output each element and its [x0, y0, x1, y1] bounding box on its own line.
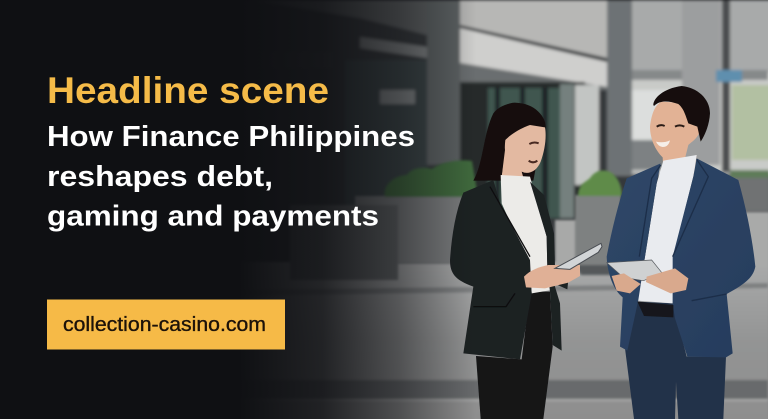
white blouse	[501, 175, 552, 293]
plaza pavement	[240, 212, 768, 419]
black blazer	[450, 180, 568, 359]
jacket lapels	[639, 159, 727, 301]
planters with shrubs	[290, 160, 622, 280]
eye and smile	[529, 142, 539, 162]
neck and face	[502, 125, 546, 183]
hair	[653, 86, 710, 142]
tablet	[555, 243, 602, 269]
subtitle line 3: gaming and payments	[47, 200, 379, 232]
navy trousers	[625, 302, 726, 419]
lapel lines	[473, 187, 530, 307]
teeth	[656, 140, 670, 147]
hair front	[491, 103, 546, 177]
pants	[476, 292, 553, 419]
subtitle line 2: reshapes debt,	[47, 161, 273, 193]
subtitle line 1: How Finance Philippines	[47, 121, 415, 153]
hands	[612, 268, 688, 293]
white shirt	[637, 155, 697, 303]
belt	[637, 302, 673, 317]
badge label: collection-casino.com	[63, 314, 266, 336]
building and plaza backdrop	[240, 0, 768, 280]
background photo: office plaza	[240, 0, 768, 419]
neck and face	[650, 102, 700, 177]
title: Headline scene: Headline scene	[47, 70, 329, 111]
smile and eyes	[657, 125, 684, 127]
call-to-action badge	[47, 300, 285, 350]
hair back	[473, 103, 546, 181]
badge background	[47, 300, 285, 350]
woman in black blazer holding tablet	[450, 103, 602, 419]
headline text block	[47, 70, 415, 232]
navy jacket	[607, 158, 755, 357]
hands	[524, 265, 580, 288]
tablet	[607, 260, 662, 281]
man in navy suit holding tablet	[607, 86, 755, 419]
